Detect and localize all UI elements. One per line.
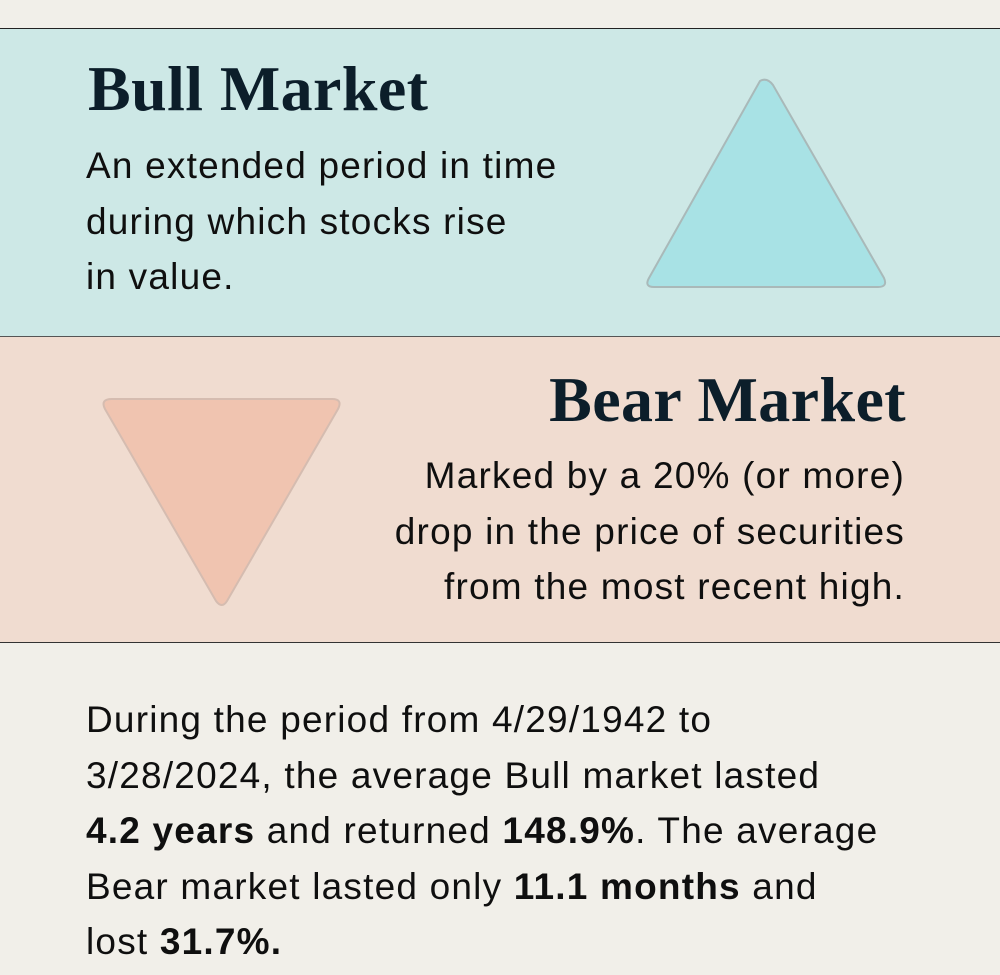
text: bull definition: An extended period in time [86,145,557,186]
text: statistics summary [86,699,878,962]
text: statistics summary: During the period from 4/29/1942 to [86,699,712,740]
text: bull definition [86,145,557,297]
text: bear definition: drop in the price of securities [395,510,905,552]
text: statistics summary: Bear market lasted only 11.1 months and [86,866,818,906]
icon: up triangle [646,78,886,288]
text: statistics summary: 3/28/2024, the average Bull market lasted [86,754,820,796]
heading: bull market: Bull Market [88,53,428,124]
text: bull definition: during which stocks rise [86,200,508,242]
text: statistics summary: lost 31.7%. [86,921,282,962]
text: bull definition: in value. [86,256,235,297]
text: bear definition: from the most recent high. [444,566,905,607]
icon: down triangle [102,398,340,606]
heading: bear market: Bear Market [549,364,906,435]
panel: bear market [0,337,1000,643]
panel: bull market [0,28,1000,338]
text: bear definition [395,455,905,607]
text: statistics summary: 4.2 years and returned 148.9%. The average [86,810,878,851]
text: bear definition: Marked by a 20% (or more) [425,455,905,496]
